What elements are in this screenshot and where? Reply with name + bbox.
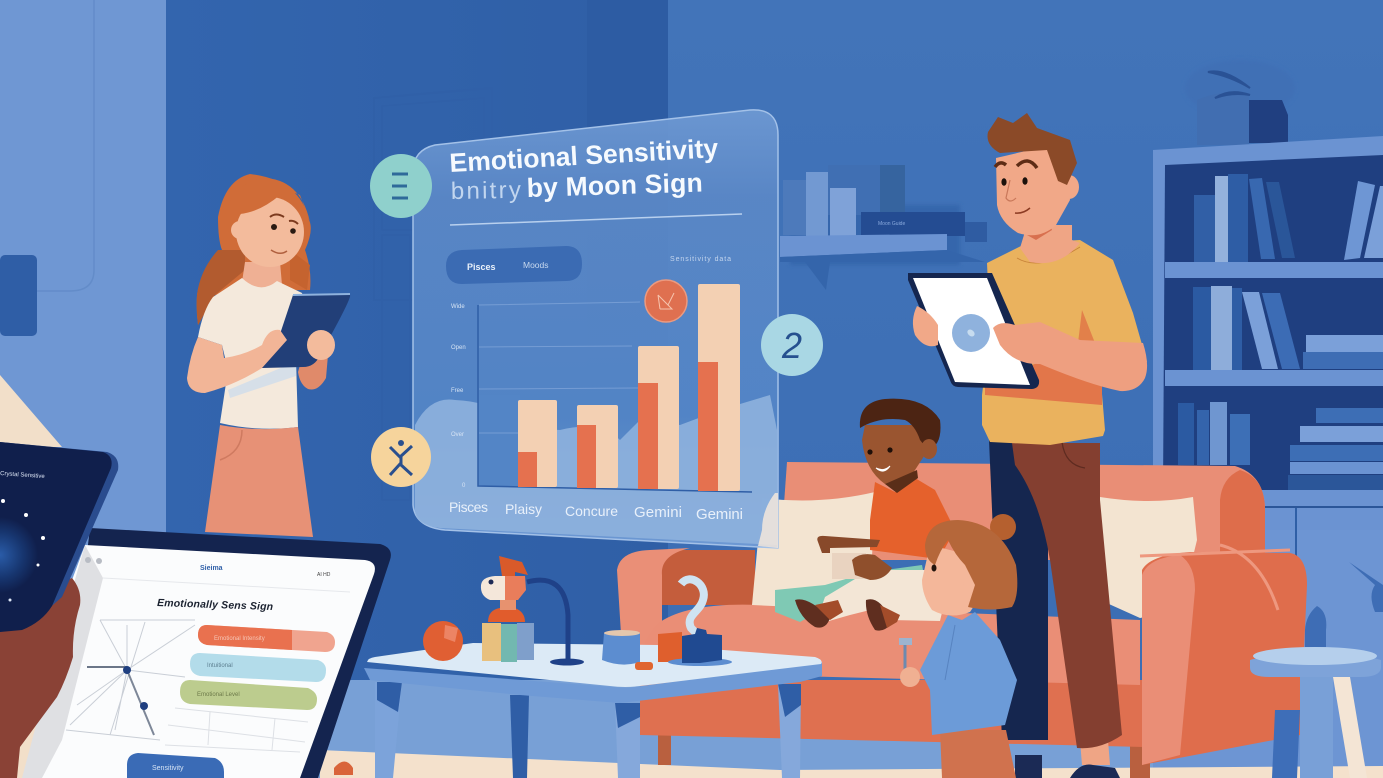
wall shelf with books: Moon Guide [878,221,905,227]
bar chart [451,284,752,492]
icon: blue number badge [761,314,823,376]
pill: green: Emotional Level [197,692,240,698]
bar chart: Free [451,388,464,394]
panel lower right glow over pillow [758,493,778,548]
panel legend pill: Moods [523,260,549,270]
slipper at lower edge [334,762,353,775]
icon: cream figure badge [371,427,431,487]
pill: green [180,680,317,710]
toy: lamp [527,580,584,666]
stool [1250,647,1381,778]
man standing with tablet [908,113,1147,778]
bar: Concure [638,346,679,489]
panel title: Emotional Sensitivity [449,133,719,178]
pill: blue [190,653,326,682]
axis labels: Plaisy [505,501,542,517]
axis labels: Gemini [696,506,743,523]
laptop star chart [66,620,195,740]
plot area tint [478,395,520,486]
toy: question mark puzzle [658,579,732,666]
man neck and head [988,113,1080,263]
sofa [617,462,1307,778]
axis labels: Gemini [634,504,682,521]
icon: blue number badge: 2 [781,325,802,366]
hand holding phone [0,578,80,778]
man tablet [908,273,1039,389]
panel legend pill [446,246,582,284]
boy on sofa [775,399,955,631]
laptop: AI HD [317,572,331,578]
axis labels: Concure [565,503,618,519]
toy: stacked blocks [482,623,534,662]
pill: blue: Intuitional [207,663,233,669]
laptop button: Sensitivity [152,765,184,772]
icon: constellation badge [645,280,687,322]
toy: cup [602,630,653,670]
girl [899,514,1017,778]
laptop button [127,753,224,778]
laptop: Sieima [200,565,223,572]
bar chart: Wide [451,304,465,310]
phone: Crystal Sensitive [0,471,46,480]
icon: teal menu badge [370,154,432,218]
pill: orange: Emotional Intensity [214,636,265,642]
bar chart: 0 [462,483,466,489]
laptop heading: Emotionally Sens Sign [157,597,273,613]
bar: Pisces [518,400,557,487]
mist at panel base [415,395,777,545]
cabinet shadow plant [1305,562,1383,647]
woman with tablet [187,174,350,537]
laptop table [165,708,308,752]
bookcase [1150,136,1383,588]
laptop [22,528,391,778]
panel legend note: Sensitivity data [670,256,731,263]
wall shelf with books [780,165,987,290]
phone [0,442,118,632]
man arms and hands [913,306,1147,391]
panel legend pill: Pisces [467,262,496,272]
bar: Gemini [698,284,740,491]
man torso [982,240,1147,445]
plant on bookcase [1185,60,1295,145]
toy: ball [423,621,463,661]
man legs [989,440,1122,778]
bar chart: Over [451,432,464,438]
coffee table [364,643,822,778]
panel title [449,133,719,205]
toy: figure [481,556,528,622]
axis labels: Pisces [449,499,488,515]
glass panel: emotional sensitivity chart [413,110,778,548]
toys on table [423,556,732,670]
bar chart: Open [451,345,466,351]
panel title: by Moon Sign [526,167,703,203]
axis labels [449,499,743,523]
bar: Plaisy [577,405,618,488]
pill: orange [198,625,335,652]
panel title: bnitry [451,177,521,205]
